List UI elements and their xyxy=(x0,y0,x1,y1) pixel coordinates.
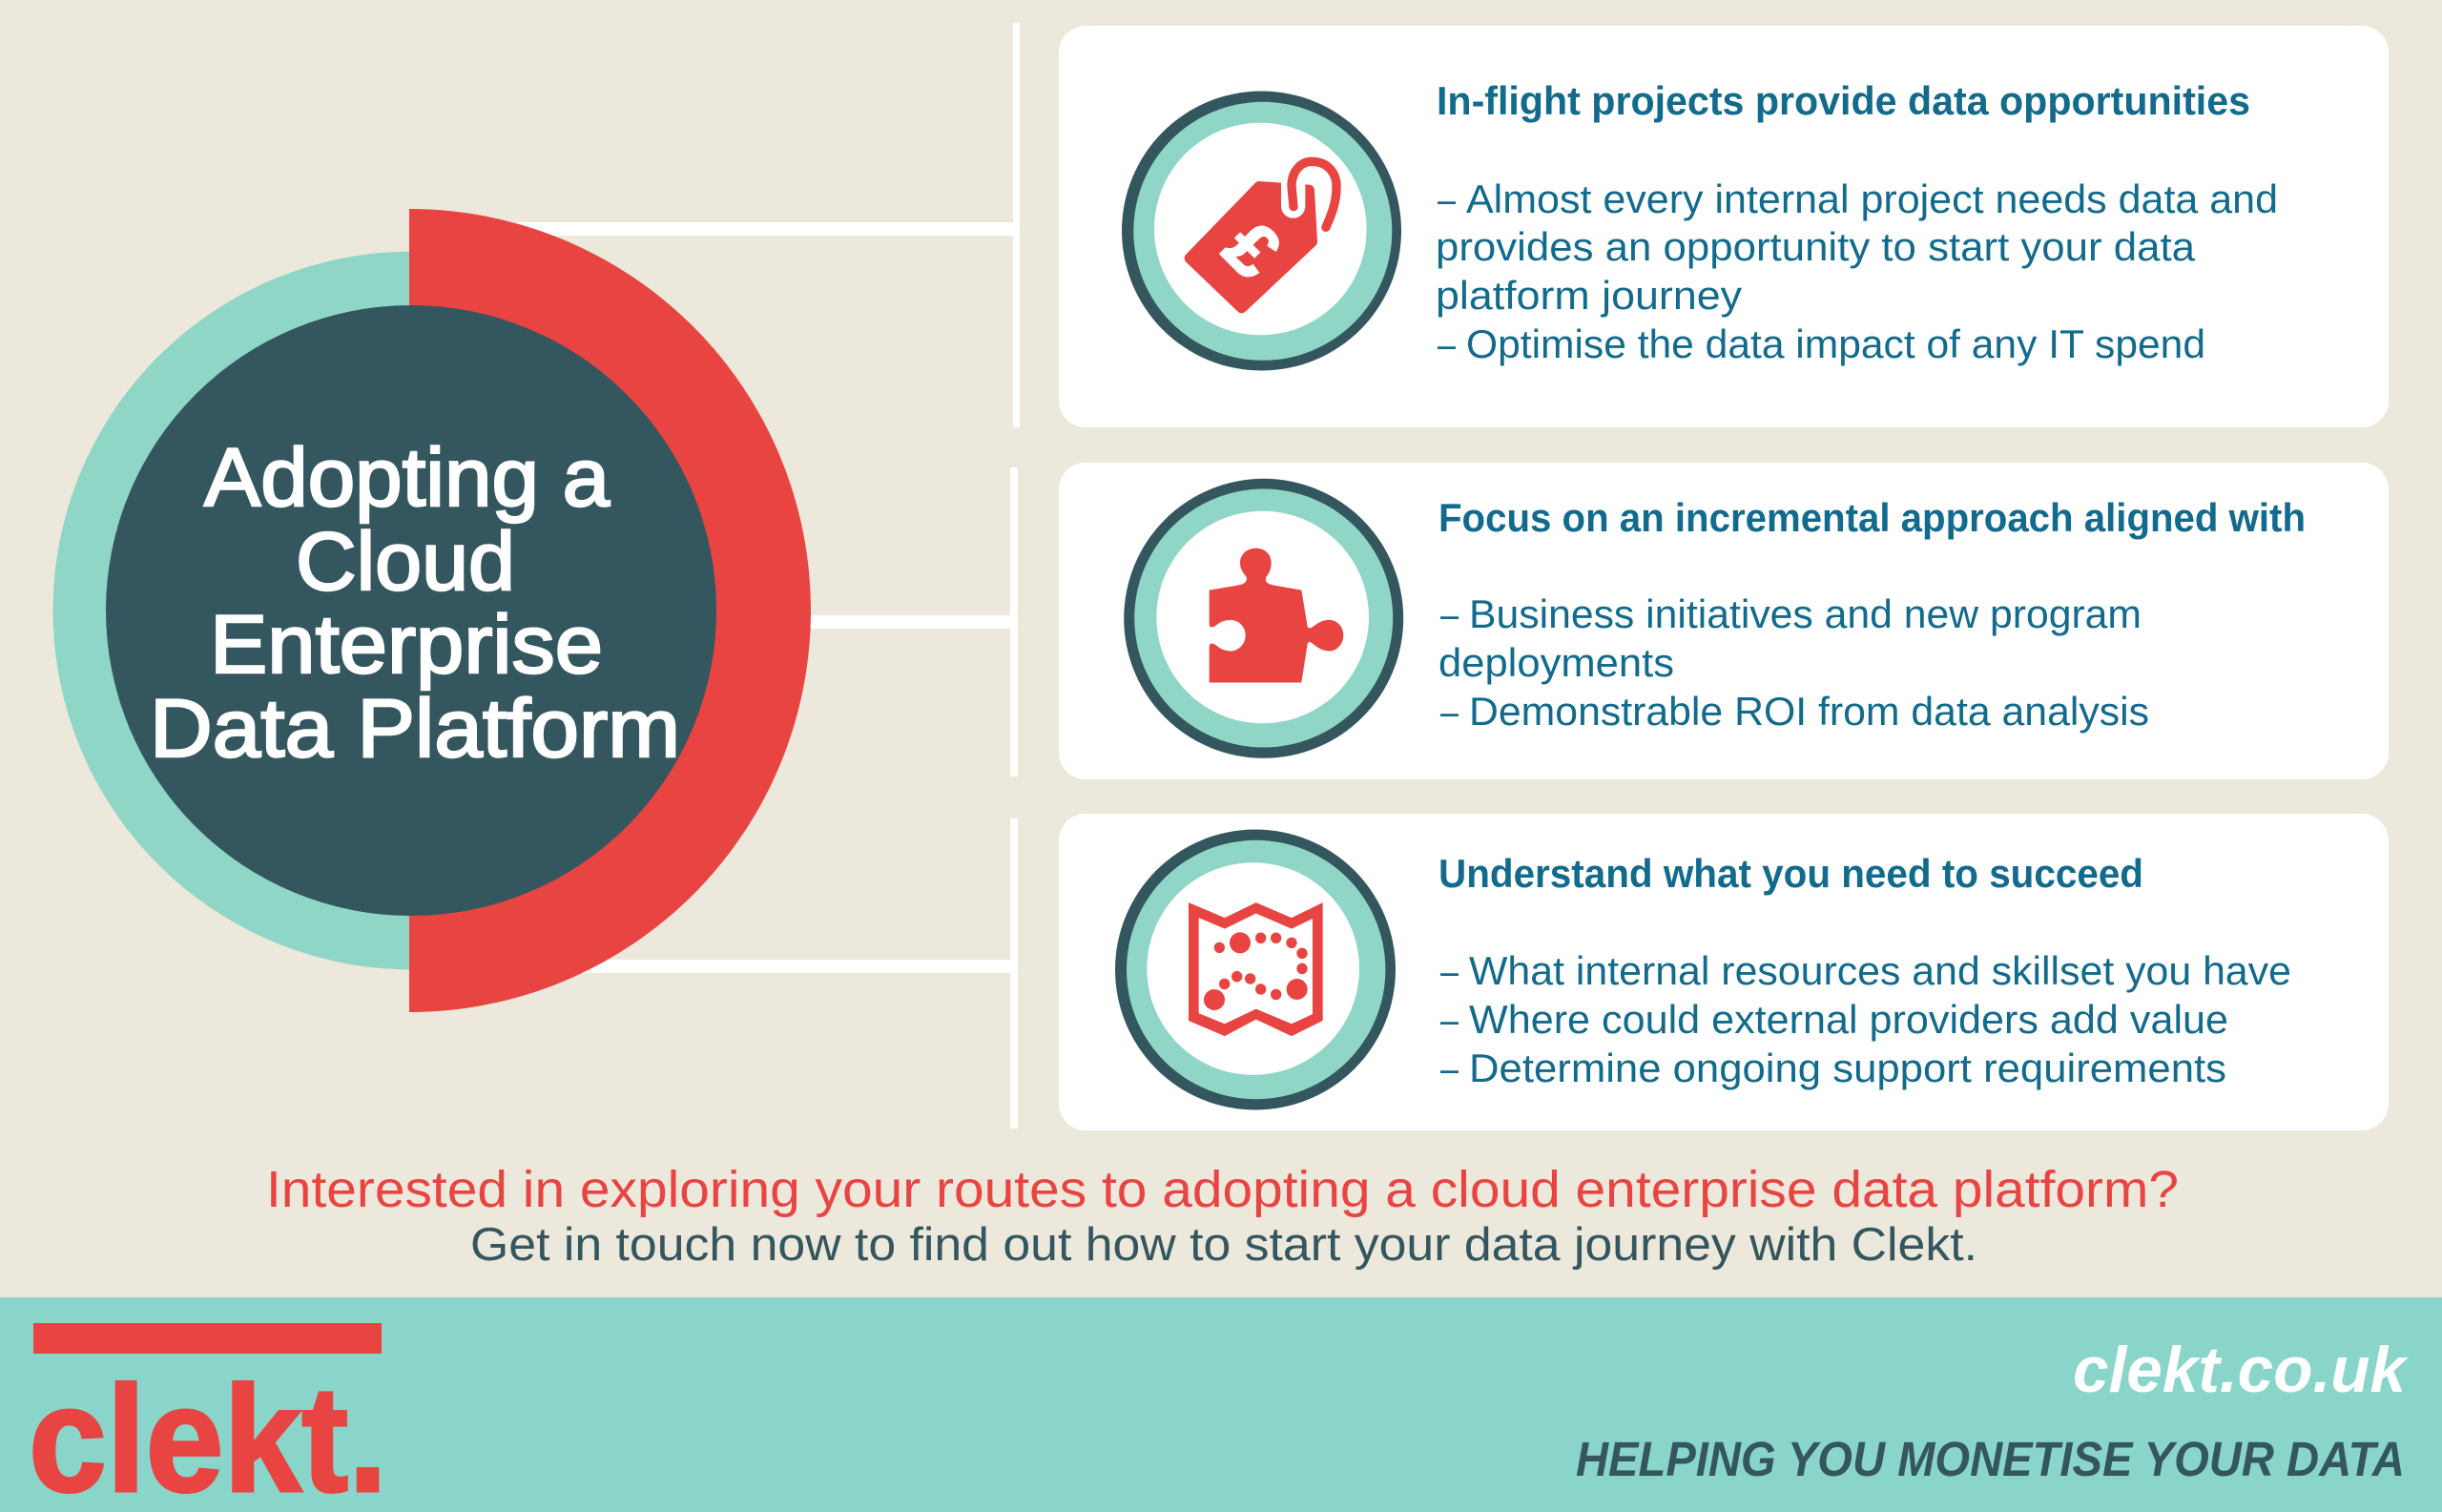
website: clekt.co.uk xyxy=(2073,1334,2409,1406)
body text: Demonstrable ROI from data analysis xyxy=(1469,689,2149,734)
title xyxy=(150,432,680,775)
body text: – xyxy=(1440,689,1459,734)
icon: price tag: £ xyxy=(1209,205,1297,294)
icon: puzzle piece xyxy=(1124,479,1403,758)
title: Adopting a xyxy=(204,432,610,524)
call to action: Get in touch now to find out how to start your data journey with Clekt. xyxy=(470,1219,1977,1271)
title: Data Platform xyxy=(150,683,680,775)
body text: – xyxy=(1440,1046,1459,1090)
body text: – xyxy=(1440,591,1459,636)
body text: Optimise the data impact of any IT spend xyxy=(1466,321,2205,366)
body text: What internal resources and skillset you have xyxy=(1469,948,2291,993)
body text xyxy=(1440,948,2291,1090)
connector lines xyxy=(515,23,1020,1129)
title: Cloud xyxy=(296,516,515,608)
body text: – xyxy=(1438,176,1457,221)
body text: Almost every internal project needs data and xyxy=(1466,176,2278,221)
footer band xyxy=(0,1297,2442,1512)
body text xyxy=(1438,591,2149,734)
panel: what you need to succeed xyxy=(1059,814,2389,1130)
body text: Business initiatives and new program xyxy=(1469,591,2142,636)
body text: – xyxy=(1440,997,1459,1042)
body text: Where could external providers add value xyxy=(1469,997,2228,1042)
body text: – xyxy=(1440,948,1459,993)
panel: incremental approach xyxy=(1059,463,2389,779)
body text: – xyxy=(1438,321,1457,366)
icon: route map xyxy=(1115,830,1396,1110)
call to action xyxy=(266,1161,2179,1271)
central circle graphic xyxy=(53,209,811,1012)
heading: Understand what you need to succeed xyxy=(1438,851,2143,896)
body text: platform journey xyxy=(1436,273,1742,318)
call to action: Interested in exploring your routes to adopting a cloud enterprise data platform? xyxy=(266,1161,2179,1218)
body text: Determine ongoing support requirements xyxy=(1469,1046,2226,1090)
icon: price tag xyxy=(1122,92,1401,370)
panel: in-flight projects xyxy=(1059,26,2389,427)
body text: deployments xyxy=(1438,640,1674,685)
heading: Focus on an incremental approach aligned with xyxy=(1438,495,2306,540)
heading: In-flight projects provide data opportunities xyxy=(1437,78,2250,123)
title: Enterprise xyxy=(210,599,603,691)
body text: provides an opportunity to start your data xyxy=(1436,224,2196,269)
body text xyxy=(1436,176,2278,366)
